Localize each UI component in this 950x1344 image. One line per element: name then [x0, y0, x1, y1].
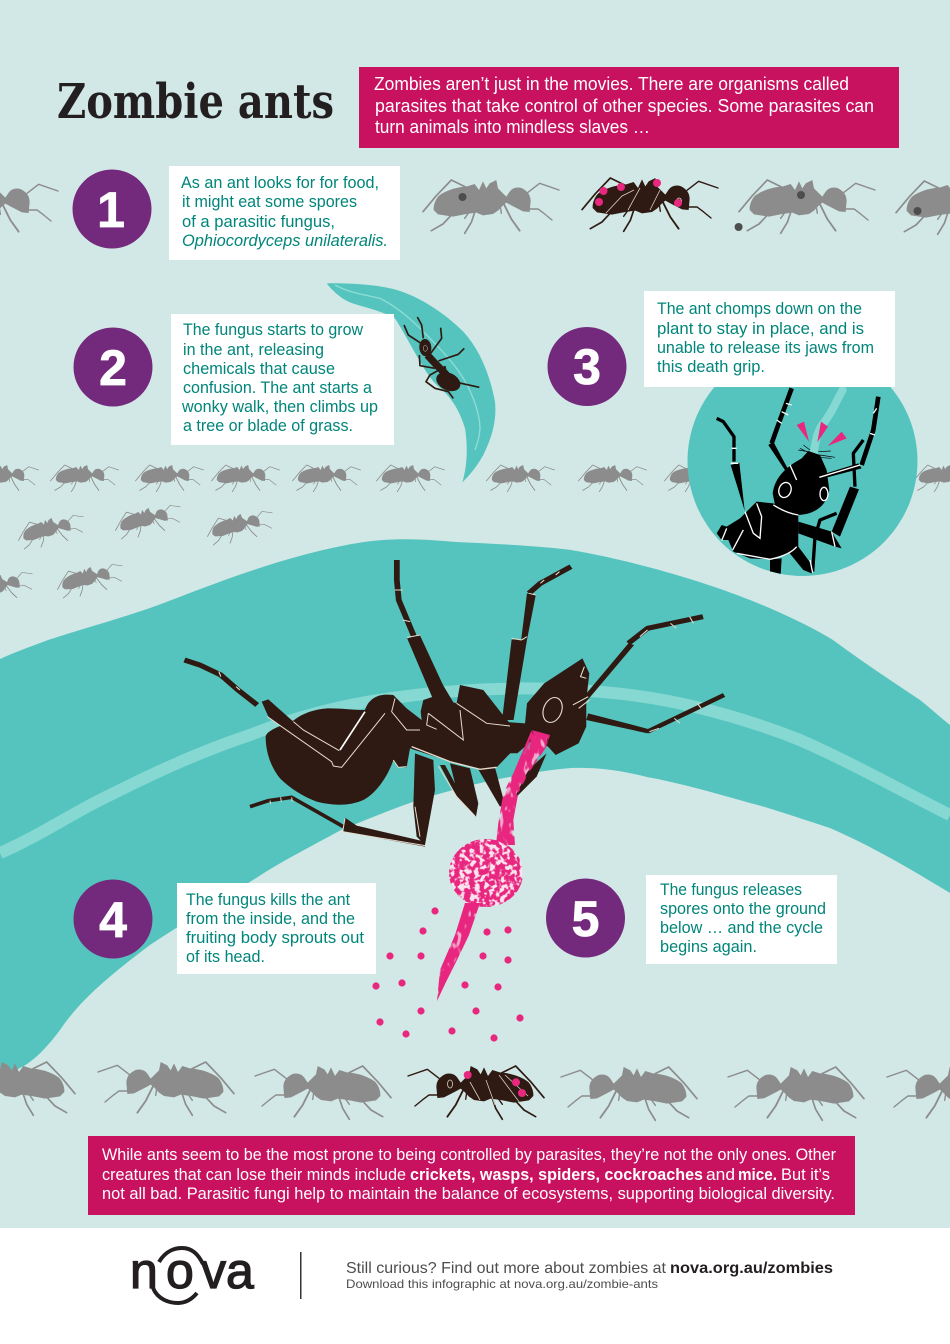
step 5 text: spores onto the ground — [660, 900, 826, 918]
infected ant: top row — [582, 178, 718, 231]
step 4 text — [177, 883, 376, 974]
closing note box: crickets, wasps, spiders, cockroaches — [410, 1166, 703, 1184]
ant on leaf — [404, 317, 479, 398]
ant row: bottom — [0, 1062, 950, 1120]
step 1 text: Ophiocordyceps unilateralis. — [182, 232, 388, 250]
step 3 text — [644, 291, 895, 387]
falling spores — [372, 907, 524, 1042]
step 5 text: begins again. — [660, 938, 757, 956]
step 1 text: it might eat some spores — [182, 193, 357, 211]
intro box: turn animals into mindless slaves … — [375, 117, 650, 137]
step 1 text: As an ant looks for for food, — [181, 174, 379, 192]
big zombie ant — [184, 560, 724, 1001]
nova logo: nova — [130, 1243, 254, 1299]
step 4 number: 4 — [99, 892, 127, 948]
step 1 text — [169, 166, 400, 260]
divider — [300, 1252, 302, 1299]
step 3 text: The ant chomps down on the — [657, 300, 862, 318]
step 1 text: of a parasitic fungus, — [182, 213, 335, 231]
step 2 text: in the ant, releasing — [183, 341, 324, 359]
footer — [0, 1228, 950, 1344]
ant row: top — [0, 180, 950, 234]
intro box: parasites that take control of other species. Some parasites can — [375, 96, 874, 116]
ant row: middle — [0, 465, 950, 608]
closing note box: not all bad. Parasitic fungi help to maintain the balance of ecosystems, supporting biological diversity. — [102, 1185, 835, 1203]
footer text: nova.org.au/zombies — [670, 1260, 833, 1277]
fungus: stalk and fruiting body — [437, 730, 550, 1001]
closing note box: But it’s — [781, 1166, 830, 1184]
footer text: Download this infographic at nova.org.au/zombie-ants — [346, 1277, 658, 1291]
step 2 text: a tree or blade of grass. — [183, 417, 353, 435]
step 1 number: 1 — [97, 182, 125, 238]
step 3 number: 3 — [573, 339, 601, 395]
intro box: Zombies aren’t just in the movies. There are organisms called — [374, 74, 849, 94]
leaf with climbing ant — [327, 283, 495, 482]
circle illustration: ant biting plant — [688, 387, 918, 576]
step 3 text: this death grip. — [657, 358, 765, 376]
step 2 text — [171, 314, 394, 445]
step 2 text: The fungus starts to grow — [183, 321, 363, 339]
step 2 text: chemicals that cause — [183, 360, 335, 378]
limbs and head — [184, 560, 724, 755]
infected ant: bottom row — [408, 1066, 544, 1119]
closing note box: While ants seem to be the most prone to being controlled by parasites, they’re not the only ones. Other — [102, 1146, 836, 1164]
closing note box — [88, 1136, 855, 1215]
closing note box: and — [706, 1166, 735, 1184]
step 2 number: 2 — [99, 340, 127, 396]
step 4 number — [74, 880, 152, 958]
step 5 text: The fungus releases — [660, 881, 802, 899]
big grass blade — [0, 539, 950, 1072]
title: Zombie ants — [57, 74, 334, 130]
footer text — [346, 1260, 833, 1291]
step 5 text — [646, 875, 837, 964]
step 2 number — [74, 328, 152, 406]
intro box — [359, 67, 899, 148]
closing note box: creatures that can lose their minds include — [102, 1166, 406, 1184]
step 3 text: plant to stay in place, and is — [657, 320, 864, 338]
step 5 text: below … and the cycle — [660, 919, 823, 937]
step 4 text: of its head. — [186, 948, 265, 966]
step 3 number — [548, 327, 626, 406]
closing note box: mice. — [738, 1166, 777, 1184]
step 5 number — [546, 878, 625, 958]
footer text: Still curious? Find out more about zombies at — [346, 1260, 667, 1277]
step 1 number — [72, 170, 152, 248]
step 4 text: fruiting body sprouts out — [186, 929, 364, 947]
step 5 number: 5 — [572, 891, 599, 947]
step 4 text: from the inside, and the — [186, 910, 355, 928]
step 2 text: wonky walk, then climbs up — [181, 398, 378, 416]
step 4 text: The fungus kills the ant — [186, 891, 350, 909]
spores on grey ants — [458, 191, 922, 231]
step 3 text: unable to release its jaws from — [657, 339, 874, 357]
body — [250, 680, 547, 847]
step 2 text: confusion. The ant starts a — [183, 379, 373, 397]
